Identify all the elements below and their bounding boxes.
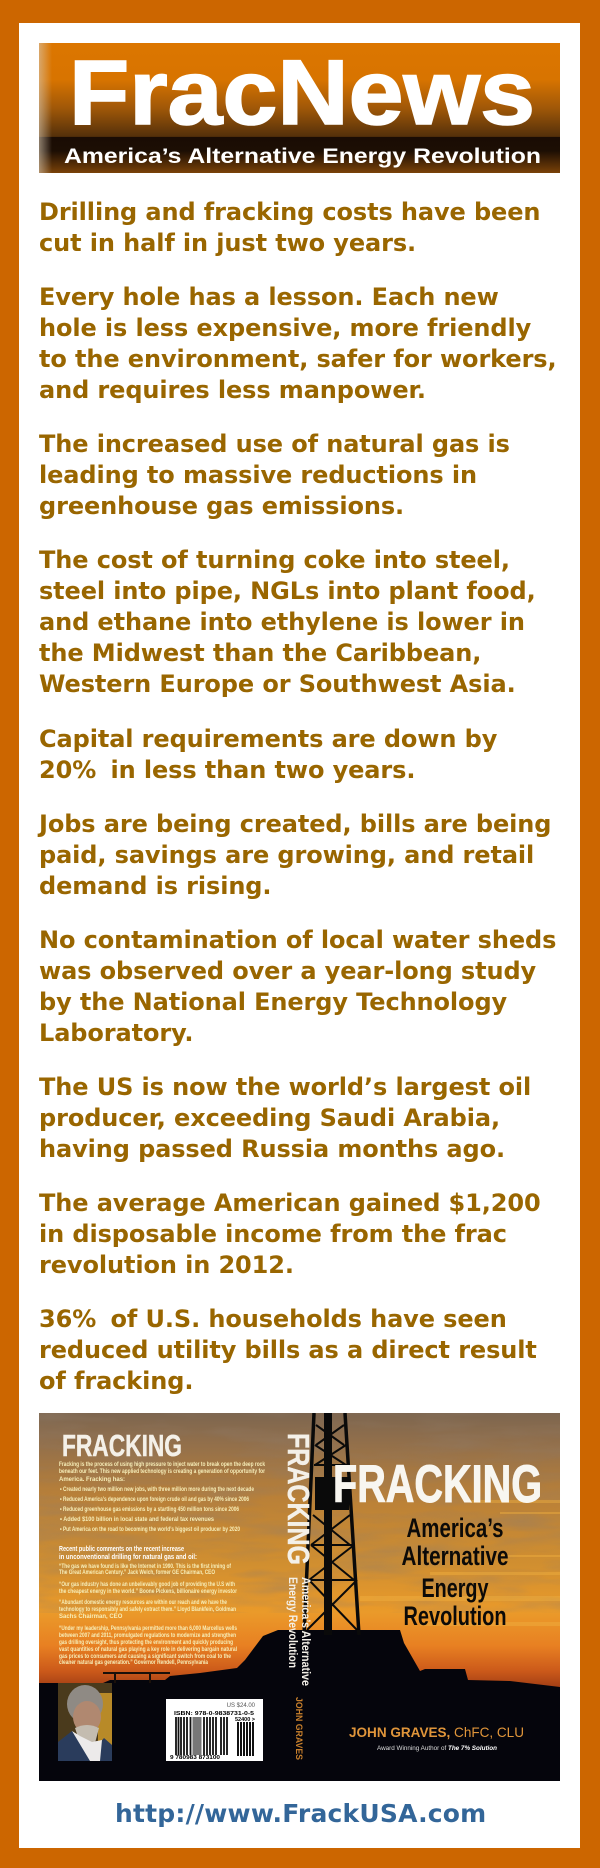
back cover text: gas drilling oversight, thus protecting the environment and quickly producing [59, 1640, 233, 1646]
back cover text: • Put America on the road to becoming the world’s biggest oil producer by 2020 [60, 1527, 241, 1533]
back cover text: • Reduced greenhouse gas emissions by a startling 450 million tons since 2006 [60, 1507, 240, 1513]
front cover subtitle [402, 1513, 508, 1631]
text block: capital [39, 725, 497, 784]
barcode: 9 780983 873100 [170, 1755, 220, 1761]
back cover text: the cheapest energy in the world.” Boone Pickens, billionaire energy investor [59, 1589, 238, 1595]
text block: costs: cut in half in just two years. [39, 229, 416, 257]
banner title: FracNews [69, 43, 535, 144]
text block: jobs: demand is rising. [39, 872, 271, 900]
text block: water: was observed over a year-long study [39, 957, 536, 985]
text block: jobs: Jobs are being created, bills are being [39, 810, 551, 838]
text block: water: No contamination of local water sheds [39, 926, 556, 954]
text block: every hole: hole is less expensive, more friendly [39, 314, 531, 342]
text block: every hole: Every hole has a lesson. Each new [39, 283, 499, 311]
text block: disposable income [39, 1189, 541, 1279]
barcode: US $24.00 [227, 1703, 256, 1709]
text block: every hole: to the environment, safer for workers, [39, 345, 557, 373]
barcode: 52400 > [235, 1717, 255, 1723]
text block: households: reduced utility bills as a direct result [39, 1336, 537, 1364]
text block: steel cost: steel into pipe, NGLs into plant food, [39, 577, 536, 605]
back cover text: • Reduced America’s dependence upon foreign crude oil and gas by 40% since 2006 [60, 1497, 250, 1503]
banner subtitle: America’s Alternative Energy Revolution [64, 145, 541, 168]
text block: water [39, 926, 556, 1047]
text block: capital: Capital requirements are down by [39, 725, 497, 753]
text block: natural gas: greenhouse gas emissions. [39, 492, 404, 520]
book cover image [39, 1413, 560, 1781]
back cover text: cleaner natural gas generation.” Governor Rendell, Pennsylvania [59, 1660, 209, 1666]
text block: water: Laboratory. [39, 1019, 193, 1047]
text block: households: 36% of U.S. households have seen [39, 1305, 507, 1333]
back cover text: “Under my leadership, Pennsylvania permitted more than 6,000 Marcellus wells [59, 1626, 238, 1632]
back cover text: Recent public comments on the recent increase [59, 1544, 184, 1553]
author tagline: Award Winning Author of The 7% Solution [377, 1745, 497, 1752]
text block: disposable income: in disposable income from the frac [39, 1220, 507, 1248]
text block: steel cost: the Midwest than the Caribbean, [39, 639, 481, 667]
text block: capital: 20% in less than two years. [39, 756, 415, 784]
author portrait [58, 1683, 112, 1761]
text block: households [39, 1305, 537, 1395]
back cover text: technology to responsibly and safely extract them.” Lloyd Blankfein, Goldman [59, 1607, 236, 1613]
back cover text: vast quantities of natural gas playing a key role in delivering bargain natural [59, 1647, 237, 1653]
front cover subtitle: Alternative [402, 1541, 508, 1571]
back cover text: gas prices to consumers and causing a significant switch from coal to the [59, 1654, 232, 1660]
text block: jobs: paid, savings are growing, and retail [39, 841, 534, 869]
drilling rig tower [304, 1413, 359, 1635]
text block: every hole [39, 283, 557, 404]
text block: households: of fracking. [39, 1367, 193, 1395]
back cover text: • Added $100 billion in local state and federal tax revenues [60, 1517, 215, 1523]
front cover subtitle: America’s [406, 1513, 504, 1543]
barcode: ISBN: 978-0-9838731-0-5 [174, 1711, 254, 1717]
back cover text: The Great American Century.” Jack Welch, former GE Chairman, CEO [59, 1570, 215, 1576]
back cover title: FRACKING [62, 1428, 182, 1463]
spine text: FRACKING [281, 1433, 316, 1565]
text block: disposable income: revolution in 2012. [39, 1251, 294, 1279]
text block: water: by the National Energy Technology [39, 988, 507, 1016]
back cover text: America. Fracking has: [59, 1477, 125, 1483]
text block: costs: Drilling and fracking costs have been [39, 198, 540, 226]
front cover subtitle: Energy [422, 1573, 488, 1603]
text block: costs [39, 198, 540, 257]
back cover text: “Abundant domestic energy resources are within our reach and we have the [59, 1600, 228, 1606]
text block: steel cost: The cost of turning coke into steel, [39, 546, 510, 574]
skyline silhouette [39, 1630, 560, 1781]
text block: natural gas [39, 430, 510, 520]
back cover text: in unconventional drilling for natural gas and oil: [59, 1552, 197, 1561]
back cover text: Fracking is the process of using high pressure to inject water to break open the deep rock [59, 1462, 266, 1468]
text block: steel cost: Western Europe or Southwest Asia. [39, 670, 516, 698]
author name: JOHN GRAVES, ChFC, CLU [349, 1724, 524, 1740]
sky [39, 1413, 560, 1781]
back cover text: • Created nearly two million new jobs, with three million more during the next decade [60, 1487, 255, 1493]
barcode [166, 1699, 263, 1761]
dock platform [103, 1673, 170, 1683]
back cover text: beneath our feet. This new applied technology is creating a generation of opportunity for [59, 1469, 266, 1475]
text block: largest producer: having passed Russia months ago. [39, 1135, 505, 1163]
text block: largest producer: producer, exceeding Saudi Arabia, [39, 1104, 500, 1132]
back cover text [59, 1462, 266, 1666]
spine text: JOHN GRAVES [294, 1697, 304, 1760]
back cover text: “Our gas industry has done an unbelievably good job of providing the U.S with [59, 1582, 235, 1588]
text block: natural gas: leading to massive reductions in [39, 461, 477, 489]
spine text [281, 1433, 316, 1760]
back cover text: Sachs Chairman, CEO [59, 1614, 123, 1620]
text block: natural gas: The increased use of natural gas is [39, 430, 510, 458]
front cover subtitle: Revolution [404, 1601, 506, 1631]
banner: FracNews masthead [39, 43, 560, 173]
text block: steel cost: and ethane into ethylene is lower in [39, 608, 525, 636]
text block: largest producer [39, 1073, 531, 1163]
text block: largest producer: The US is now the world’s largest oil [39, 1073, 531, 1101]
website url: http://www.FrackUSA.com [115, 1799, 486, 1828]
spine text: America’s Alternative [299, 1577, 313, 1686]
text block: jobs [38, 810, 551, 900]
text block: steel cost [39, 546, 536, 698]
text block: every hole: and requires less manpower. [39, 376, 426, 404]
text block: disposable income: The average American gained $1,200 [39, 1189, 541, 1217]
spine text: Energy Revolution [286, 1577, 300, 1668]
back cover text: “The gas we have found is like the Internet in 1990. This is the first inning of [59, 1564, 232, 1570]
back cover text: between 2007 and 2011, promulgated regulations to modernize and strengthen [59, 1633, 236, 1639]
